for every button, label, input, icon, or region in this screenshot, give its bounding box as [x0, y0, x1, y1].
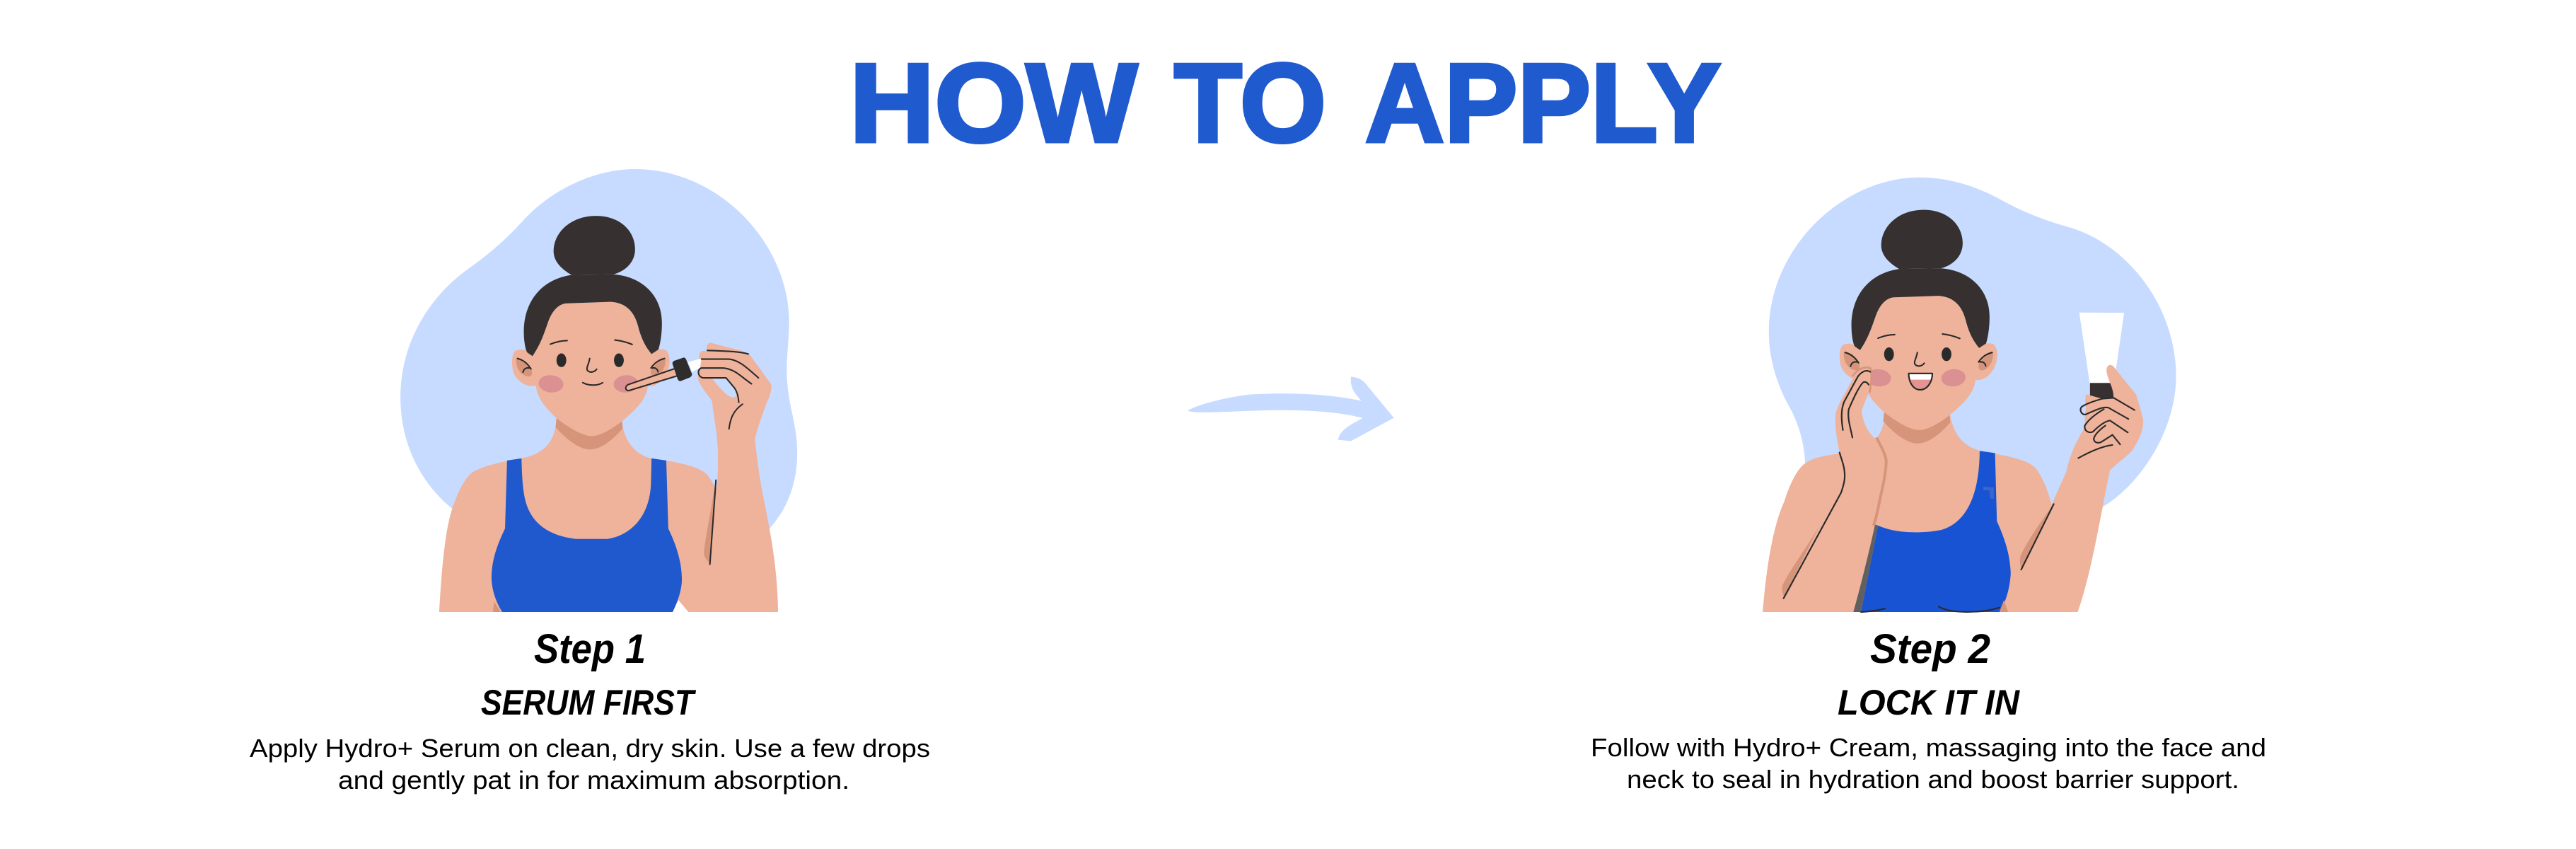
step description: and gently pat in for maximum absorption. — [338, 766, 849, 795]
step heading: LOCK IT IN — [1838, 683, 2020, 722]
title — [849, 41, 1721, 166]
ear lines — [518, 359, 665, 372]
cream tube — [2079, 313, 2124, 386]
hair bun — [554, 216, 635, 275]
hair — [1852, 268, 1990, 350]
step number: Step 1 — [534, 626, 646, 672]
blue top — [492, 458, 682, 612]
eyes — [557, 354, 567, 367]
blue top — [1861, 451, 2011, 612]
strap detail — [1983, 487, 1994, 499]
step description: Apply Hydro+ Serum on clean, dry skin. Use a few drops — [250, 734, 930, 763]
title: APPLY — [1365, 41, 1721, 166]
finger lines — [698, 350, 758, 429]
right ear — [1973, 343, 1997, 380]
dropper rod — [626, 369, 678, 391]
background blob — [1769, 178, 2176, 543]
face — [533, 302, 651, 436]
left ear — [1840, 344, 1864, 380]
dropper cap — [673, 357, 692, 381]
left arm lines — [1784, 452, 1845, 599]
title: TO — [1174, 41, 1326, 166]
open mouth — [1909, 374, 1932, 390]
teeth — [1910, 374, 1932, 380]
dropper glass — [688, 359, 702, 372]
torso — [439, 418, 743, 612]
left elbow shadow — [1782, 526, 1820, 597]
step description — [250, 734, 930, 795]
tube cap — [2090, 383, 2113, 404]
step description — [1591, 733, 2266, 794]
eyes — [1884, 347, 1894, 361]
left forearm and hand — [1763, 367, 1886, 612]
arrow — [1188, 376, 1394, 441]
top lines — [1861, 606, 2000, 612]
step heading: SERUM FIRST — [481, 683, 697, 722]
title: HOW — [849, 41, 1137, 166]
step number: Step 2 — [1870, 626, 1990, 672]
top side shadow — [2000, 600, 2008, 612]
ear lines — [1845, 352, 1992, 366]
torso — [1763, 410, 2064, 612]
neck shadow — [1884, 412, 1950, 444]
illustration: woman applying serum — [400, 169, 797, 612]
panel: step 2 — [1591, 178, 2266, 794]
right ear — [645, 350, 670, 386]
head — [1840, 210, 1997, 444]
under-arm shadow — [493, 601, 501, 612]
body — [1763, 410, 2064, 612]
brows nose mouth — [550, 340, 632, 385]
panel: step 1 — [250, 169, 930, 795]
gap between fingers — [712, 379, 737, 398]
grey strap — [1853, 524, 1878, 612]
brows and nose — [1878, 334, 1960, 366]
hands and arms — [1763, 313, 2143, 612]
left ear — [512, 350, 537, 386]
face — [1860, 296, 1979, 430]
elbow shadow — [704, 487, 714, 562]
forearm edge — [1874, 437, 1886, 526]
right arm and hand — [2033, 365, 2143, 612]
right hand finger lines — [2078, 398, 2135, 458]
step description: neck to seal in hydration and boost barrier support. — [1627, 765, 2239, 794]
background blob — [400, 169, 797, 573]
right elbow shadow — [2020, 504, 2053, 569]
hair bun — [1881, 210, 1963, 269]
cheeks — [1865, 368, 1892, 388]
left finger lines — [1842, 371, 1870, 437]
illustration: woman with cream tube — [1763, 178, 2176, 612]
neck shadow — [556, 418, 622, 449]
hair — [524, 275, 662, 356]
cheeks — [538, 374, 564, 393]
fingertip edge — [1852, 367, 1872, 393]
arm and hand — [678, 343, 778, 612]
step description: Follow with Hydro+ Cream, massaging into the face and — [1591, 733, 2266, 762]
